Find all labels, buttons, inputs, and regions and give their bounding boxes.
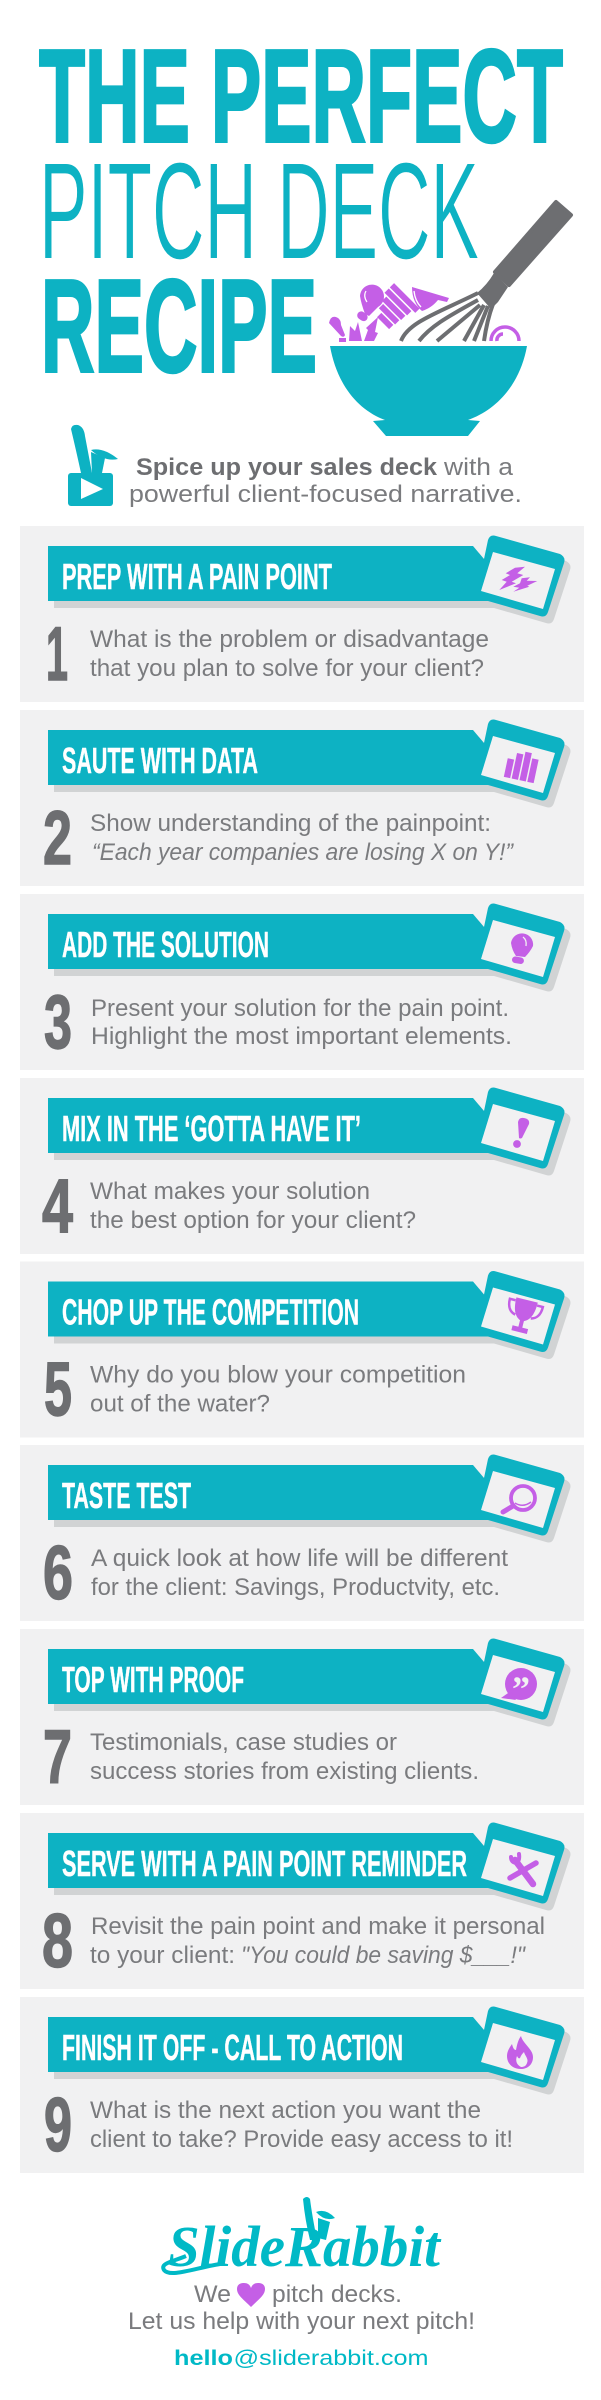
logo: SlideRabbit: SlideRabbit — [168, 2214, 442, 2279]
description: Show understanding of the painpoint: — [90, 810, 491, 837]
whisk — [401, 202, 571, 341]
title — [39, 22, 563, 400]
number: 2 — [43, 796, 72, 881]
heading: ADD THE SOLUTION — [62, 924, 269, 965]
number: 8 — [42, 1899, 73, 1984]
panel 4: mix in the gotta have it — [20, 1078, 584, 1254]
contact email: @sliderabbit.com — [234, 2347, 428, 2370]
bowl — [330, 346, 527, 436]
description — [90, 1178, 416, 1234]
description: for the client: Savings, Productvity, etc. — [91, 1574, 500, 1601]
panel 9: finish it off — [20, 1997, 584, 2173]
description: What is the problem or disadvantage — [90, 626, 489, 653]
tagline: with a — [443, 454, 514, 481]
description: that you plan to solve for your client? — [90, 655, 484, 682]
description: "You could be saving $___!" — [241, 1942, 526, 1969]
footer message: We — [194, 2281, 231, 2308]
heading: SAUTE WITH DATA — [62, 740, 258, 781]
description: A quick look at how life will be different — [91, 1545, 508, 1572]
number: 7 — [43, 1715, 72, 1800]
ingredient: light bulb — [356, 285, 384, 323]
ingredient: trophy — [412, 287, 449, 311]
ingredient: lightning bolts — [349, 317, 378, 341]
heading: CHOP UP THE COMPETITION — [62, 1292, 359, 1332]
number: 5 — [44, 1348, 72, 1432]
panel 2: saute with data — [20, 710, 584, 886]
ingredient: ring — [491, 327, 519, 341]
description: out of the water? — [90, 1390, 270, 1418]
tagline: Spice up your sales deck — [136, 454, 438, 481]
panel 7: top with proof — [20, 1629, 584, 1805]
number: 9 — [44, 2083, 72, 2168]
description: What makes your solution — [90, 1178, 370, 1205]
heading: MIX IN THE ‘GOTTA HAVE IT’ — [62, 1108, 361, 1149]
title: RECIPE — [41, 252, 317, 400]
description: the best option for your client? — [90, 1207, 416, 1234]
icon: bowl with whisk and ingredients — [329, 202, 571, 436]
icon: speech bubble — [501, 1668, 537, 1709]
description: Why do you blow your competition — [90, 1362, 466, 1388]
footer message — [128, 2281, 475, 2335]
description: to your client: — [90, 1942, 235, 1969]
banner — [48, 1271, 564, 1352]
heading: TASTE TEST — [62, 1475, 191, 1516]
icon: play button rabbit — [68, 425, 118, 506]
description: client to take? Provide easy access to it! — [90, 2126, 513, 2153]
description: Revisit the pain point and make it personal — [91, 1913, 545, 1940]
icon: light bulb — [511, 933, 533, 964]
heading: PREP WITH A PAIN POINT — [62, 556, 332, 597]
banner — [48, 2006, 564, 2088]
description: Present your solution for the pain point. — [91, 995, 509, 1022]
description — [91, 1545, 508, 1601]
number: 6 — [43, 1531, 73, 1616]
description — [90, 626, 489, 682]
description: Highlight the most important elements. — [91, 1023, 512, 1050]
description — [90, 1729, 479, 1785]
icon: lightning bolts — [499, 567, 537, 592]
panel 5: chop up the competition — [20, 1262, 584, 1438]
number: 3 — [44, 980, 72, 1065]
banner — [48, 720, 564, 800]
banner — [48, 1088, 564, 1168]
description — [91, 995, 512, 1050]
icon: flame — [507, 2036, 533, 2069]
panel 8: serve with a pain point reminder — [20, 1813, 584, 1989]
banner — [48, 1638, 564, 1720]
ingredient: exclamation mark — [329, 317, 346, 342]
banner — [48, 536, 564, 616]
icon: trophy — [503, 1296, 544, 1336]
description: Testimonials, case studies or — [90, 1729, 397, 1756]
heading: TOP WITH PROOF — [62, 1659, 244, 1700]
description: What is the next action you want the — [90, 2097, 481, 2124]
panel 1: prep with a pain point — [20, 526, 584, 702]
banner — [48, 904, 564, 984]
footer message: pitch decks. — [272, 2281, 402, 2308]
tagline — [129, 454, 522, 508]
ingredient: bar chart — [369, 283, 420, 334]
footer message: Let us help with your next pitch! — [128, 2308, 475, 2335]
icon: crossed tools — [510, 1854, 536, 1884]
description — [90, 810, 514, 866]
icon: heart — [237, 2283, 265, 2307]
description — [90, 2097, 513, 2153]
description — [90, 1362, 466, 1418]
contact email: hello — [174, 2347, 233, 2370]
description — [90, 1913, 545, 1969]
icon: magnifying glass — [503, 1486, 535, 1512]
panel 6: taste test — [20, 1445, 584, 1621]
tagline: powerful client-focused narrative. — [129, 481, 522, 508]
number: 1 — [46, 612, 68, 697]
number: 4 — [42, 1164, 73, 1249]
icon: speech bubble: ” — [512, 1669, 530, 1709]
icon: bar chart — [504, 748, 540, 783]
contact email — [174, 2347, 428, 2370]
banner — [48, 1454, 564, 1536]
banner — [48, 1822, 564, 1904]
icon: exclamation mark — [513, 1118, 529, 1148]
description: success stories from existing clients. — [90, 1758, 479, 1785]
panel 3: add the solution — [20, 894, 584, 1070]
description: “Each year companies are losing X on Y!” — [92, 839, 514, 866]
